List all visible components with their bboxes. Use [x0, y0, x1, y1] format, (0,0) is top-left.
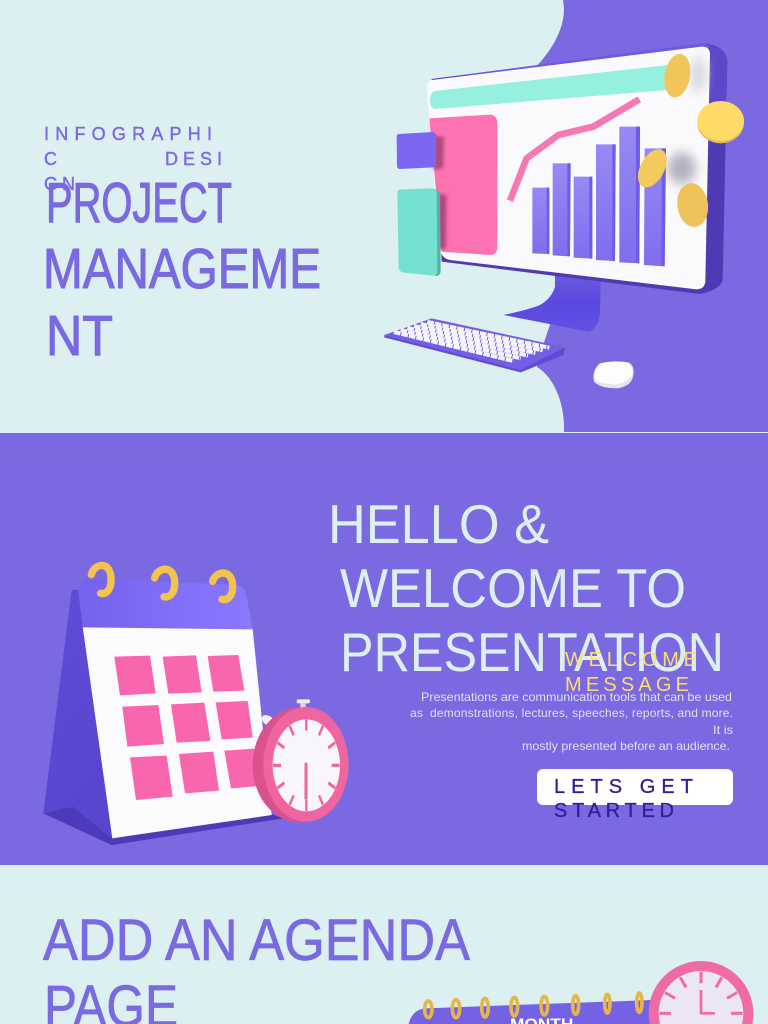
title: project management: MANAGEME — [43, 237, 321, 301]
text block: description: as demonstrations, lectures, speeches, reports, and more. — [410, 706, 733, 720]
illustration: month calendar with clock — [408, 961, 753, 1024]
calendar rings — [425, 993, 642, 1018]
heading: hello and welcome — [328, 493, 724, 683]
floating teal card — [433, 189, 441, 276]
subtitle: infographic design — [44, 124, 222, 194]
subtitle: infographic design: DESI — [165, 149, 222, 169]
title: project management — [43, 171, 321, 368]
panel: agenda slide — [0, 865, 768, 1024]
purple blob background — [520, 0, 768, 432]
monitor frame — [432, 43, 727, 294]
stopwatch hand — [301, 764, 310, 798]
screen shadows — [668, 152, 696, 184]
stopwatch body — [253, 708, 346, 822]
teal header bar — [430, 65, 668, 109]
stopwatch — [253, 699, 349, 822]
text block: description: mostly presented before an audience. — [522, 739, 730, 753]
text block: description: It is — [713, 723, 733, 737]
wall clock — [649, 961, 753, 1024]
pink panel — [429, 115, 497, 255]
button: lets get started: LETS GET — [554, 776, 693, 798]
line chart — [510, 99, 639, 201]
stopwatch buttons — [297, 699, 310, 703]
illustration: calendar with stopwatch — [43, 565, 349, 845]
panel: welcome slide — [0, 433, 768, 865]
calendar rings — [91, 565, 233, 600]
title: project management: NT — [46, 304, 113, 368]
label: welcome message: MESSAGE — [565, 674, 689, 696]
title: project management: PROJECT — [46, 171, 232, 235]
subtitle: infographic design: C — [44, 149, 57, 169]
monitor stand — [503, 275, 601, 332]
text block: description: Presentations are communication tools that can be used — [421, 690, 732, 704]
gold coins — [632, 52, 744, 229]
label: welcome message: WELCOME — [565, 649, 697, 671]
illustration: desktop computer with charts — [384, 43, 744, 388]
mouse — [593, 361, 634, 388]
calendar page — [83, 627, 272, 838]
floating purple square — [397, 132, 436, 169]
subtitle: infographic design: INFOGRAPHI — [44, 124, 212, 144]
heading: hello and welcome: HELLO & — [328, 493, 549, 555]
heading: add an agenda page: ADD AN AGENDA — [43, 908, 470, 973]
stopwatch face — [273, 719, 340, 811]
label: welcome message — [565, 649, 697, 696]
floating square shadows — [433, 136, 447, 250]
calendar back and base — [43, 590, 283, 845]
button: lets get started — [537, 769, 733, 822]
heading: hello and welcome: PRESENTATION — [340, 621, 724, 683]
calendar body — [408, 1000, 653, 1024]
monitor screen — [427, 47, 710, 289]
text block: description — [410, 690, 733, 753]
heading: hello and welcome: WELCOME TO — [340, 557, 686, 619]
bar chart — [532, 127, 666, 266]
stopwatch ticks — [273, 720, 340, 811]
calendar header — [78, 578, 253, 629]
heading: add an agenda page — [43, 908, 470, 1024]
calendar date squares — [114, 655, 260, 800]
button: lets get started: STARTED — [554, 800, 674, 822]
panel: title slide — [0, 0, 768, 432]
keyboard — [384, 318, 565, 372]
subtitle: infographic design: GN — [44, 174, 75, 194]
